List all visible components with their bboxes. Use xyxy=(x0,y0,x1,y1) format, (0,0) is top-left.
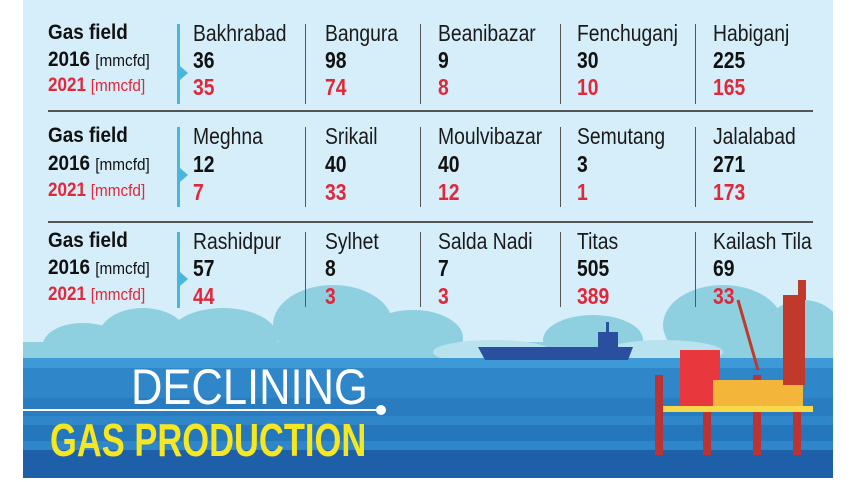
row 1: Habiganj xyxy=(713,20,789,46)
row 3: 7 xyxy=(438,255,449,281)
row 3: 505 xyxy=(577,255,609,281)
row 2: Moulvibazar xyxy=(438,123,542,149)
row 2: 40 xyxy=(438,151,459,177)
row 2: Gas field xyxy=(48,124,128,147)
row 1: 10 xyxy=(577,74,598,100)
row 1: 2021 [mmcfd] xyxy=(48,75,145,96)
row 2: 33 xyxy=(325,179,346,205)
row 3: 44 xyxy=(193,283,214,309)
row 2: 173 xyxy=(713,179,745,205)
row 2: Jalalabad xyxy=(713,123,796,149)
row 2: 271 xyxy=(713,151,745,177)
row 3: 33 xyxy=(713,283,734,309)
row 1: 30 xyxy=(577,47,598,73)
row 1: 225 xyxy=(713,47,745,73)
row 1: 9 xyxy=(438,47,449,73)
row 3: Rashidpur xyxy=(193,228,281,254)
row 3 xyxy=(48,228,812,309)
row 1: Beanibazar xyxy=(438,20,536,46)
row 3: Titas xyxy=(577,228,618,254)
row 3: 2016 [mmcfd] xyxy=(48,256,150,279)
row 3: Gas field xyxy=(48,229,128,252)
row 2: 12 xyxy=(438,179,459,205)
row 1: 165 xyxy=(713,74,745,100)
row 2 xyxy=(48,123,796,207)
row 2: Srikail xyxy=(325,123,378,149)
row 3: 57 xyxy=(193,255,214,281)
row 2: 40 xyxy=(325,151,346,177)
row 2: 3 xyxy=(577,151,588,177)
title: GAS PRODUCTION: GAS PRODUCTION xyxy=(50,414,366,466)
title: DECLINING: DECLINING xyxy=(131,359,368,415)
row 3: 389 xyxy=(577,283,609,309)
row 1: 35 xyxy=(193,74,214,100)
row 1: 2016 [mmcfd] xyxy=(48,48,150,71)
row 3: 69 xyxy=(713,255,734,281)
row 3: 3 xyxy=(325,283,336,309)
row 2: 12 xyxy=(193,151,214,177)
row 3: Sylhet xyxy=(325,228,379,254)
row 1: Gas field xyxy=(48,21,128,44)
row 3: 3 xyxy=(438,283,449,309)
row 1: 74 xyxy=(325,74,346,100)
row 2: Meghna xyxy=(193,123,263,149)
row 1: 36 xyxy=(193,47,214,73)
row 1: Fenchuganj xyxy=(577,20,678,46)
row 2: 7 xyxy=(193,179,204,205)
title underline xyxy=(23,409,381,411)
row 2: 2021 [mmcfd] xyxy=(48,180,145,201)
row 2: 2016 [mmcfd] xyxy=(48,152,150,175)
row 1: 98 xyxy=(325,47,346,73)
row 2: Semutang xyxy=(577,123,665,149)
row 2: 1 xyxy=(577,179,588,205)
row 1: Bangura xyxy=(325,20,398,46)
illustration: sea background xyxy=(23,280,833,478)
row 3: Salda Nadi xyxy=(438,228,533,254)
row 1 xyxy=(48,20,789,104)
row 3: 8 xyxy=(325,255,336,281)
row 3: 2021 [mmcfd] xyxy=(48,284,145,305)
row 3: Kailash Tila xyxy=(713,228,812,254)
row 1: Bakhrabad xyxy=(193,20,286,46)
row 1: 8 xyxy=(438,74,449,100)
